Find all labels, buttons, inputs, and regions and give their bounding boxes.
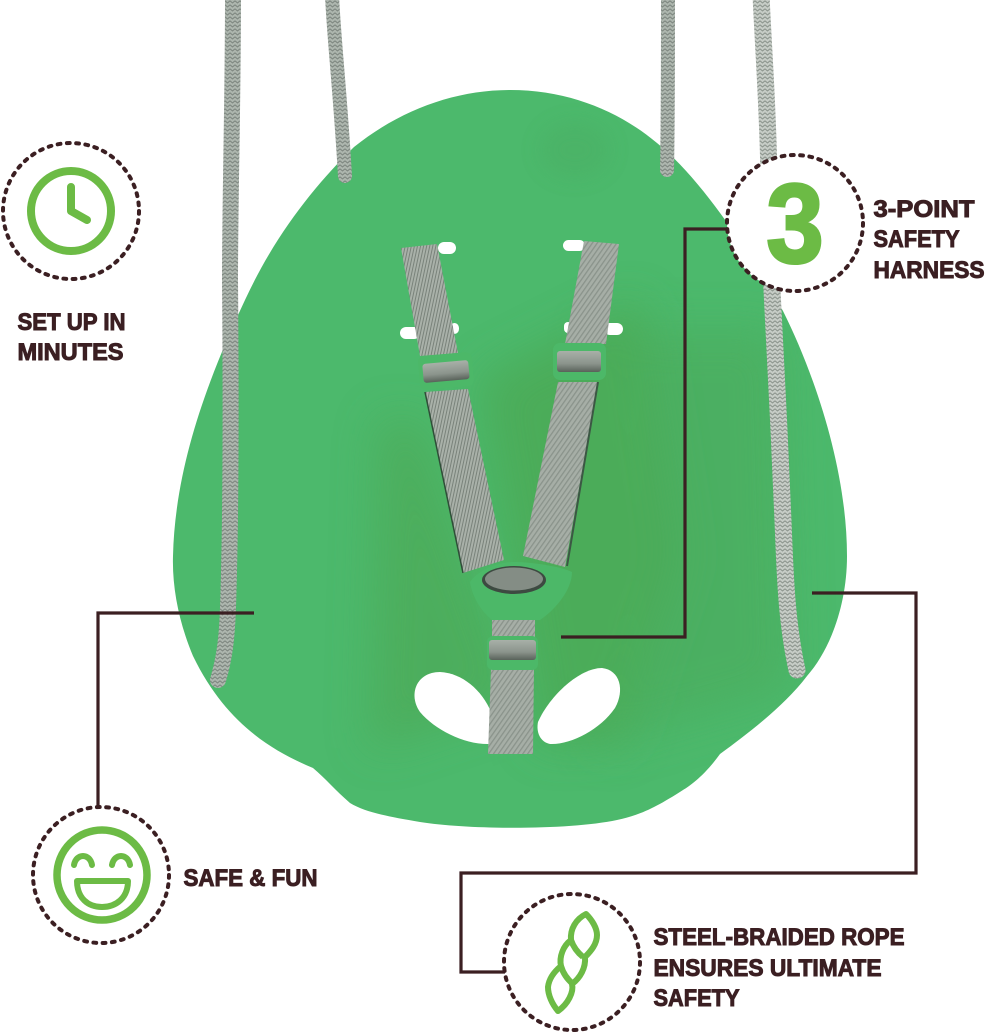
- label: set up in minutes: MINUTES: [18, 339, 124, 366]
- swing seat product: [173, 0, 847, 828]
- rope: left outer: [218, 0, 233, 680]
- callout line: harness: [561, 229, 728, 637]
- label: set up in minutes: SET UP IN: [18, 309, 126, 336]
- dotted circle: [33, 807, 169, 943]
- label: steel-braided rope ensures ultimate safety: ENSURES ULTIMATE: [654, 955, 882, 982]
- buckle: adjusters: [418, 343, 606, 670]
- harness straps: [401, 241, 619, 754]
- label: set up in minutes: [18, 309, 126, 366]
- rope: right outer: [761, 0, 797, 670]
- feature: set up in minutes: [3, 143, 139, 366]
- label: steel-braided rope ensures ultimate safety: [654, 924, 904, 1012]
- icon: clock: [31, 171, 111, 251]
- buckle: central chest clip: [470, 562, 572, 620]
- leg holes: [414, 668, 620, 744]
- feature: safe and fun: [33, 807, 318, 943]
- label: steel-braided rope ensures ultimate safety: STEEL-BRAIDED ROPE: [654, 924, 904, 951]
- dotted circle: [727, 155, 863, 291]
- feature: 3-point harness: [727, 155, 984, 291]
- rope: upper inner pair: [332, 0, 668, 176]
- callout line: safe and fun: [98, 613, 254, 808]
- seat shell: [173, 90, 847, 828]
- label: 3-point safety harness: SAFETY: [874, 226, 960, 253]
- feature: steel-braided rope: [504, 894, 904, 1030]
- seat shading: [372, 306, 792, 752]
- label: steel-braided rope ensures ultimate safety: SAFETY: [654, 985, 740, 1012]
- icon: number 3: 3: [766, 161, 824, 286]
- icon: braided rope: [548, 914, 597, 1011]
- harness slots: [400, 240, 623, 339]
- label: 3-point safety harness: HARNESS: [874, 257, 984, 284]
- label: safe and fun: SAFE & FUN: [184, 865, 318, 892]
- dotted circle: [504, 894, 640, 1030]
- label: 3-point safety harness: [874, 196, 984, 284]
- dotted circle: [3, 143, 139, 279]
- label: 3-point safety harness: 3-POINT: [874, 196, 975, 223]
- callout line: rope: [461, 593, 916, 972]
- icon: smiley: [57, 830, 147, 920]
